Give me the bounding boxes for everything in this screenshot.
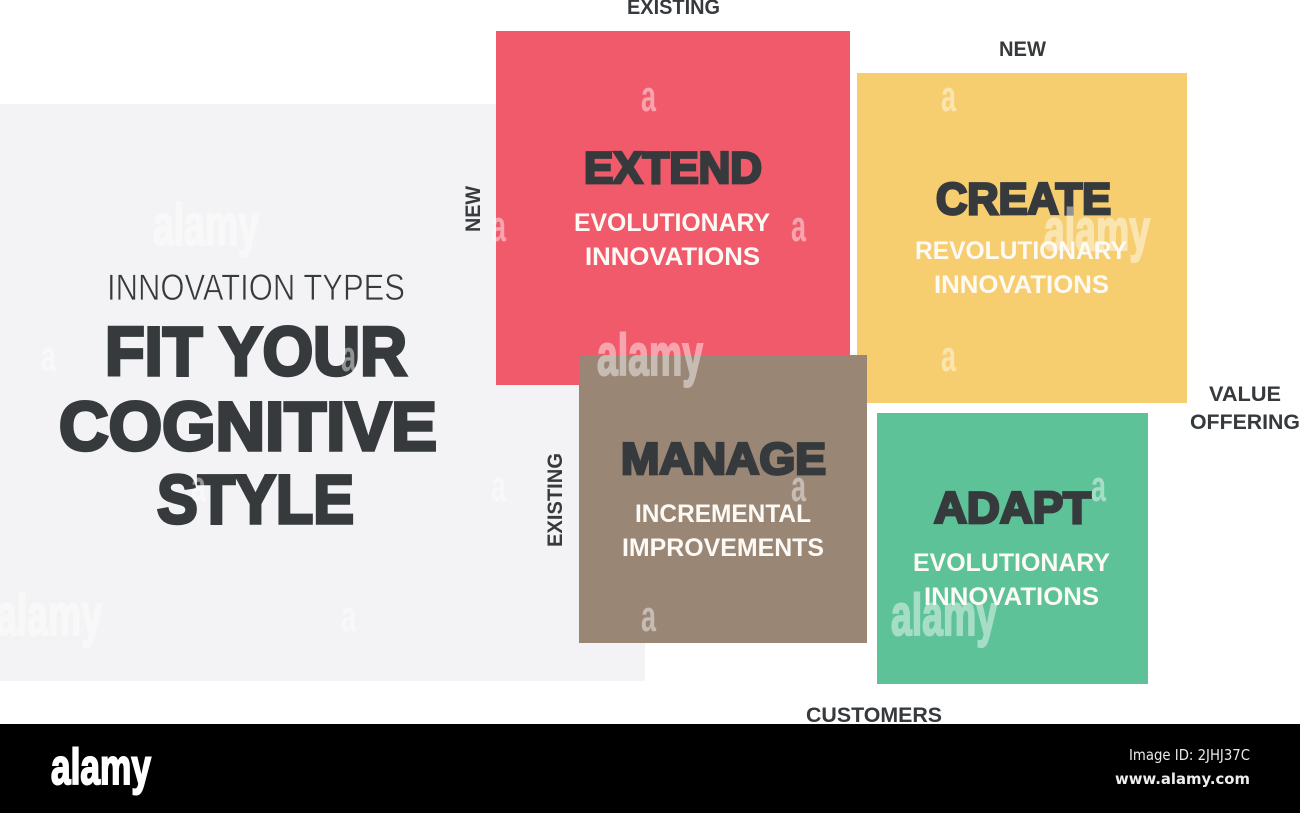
watermarks: a: [641, 592, 656, 641]
panel: manage: MANAGE: [621, 435, 826, 484]
watermarks: alamy: [597, 323, 703, 388]
axis label: existing vertical: EXISTING: [544, 453, 567, 547]
axis label: value offering: VALUE: [1209, 383, 1281, 406]
axis label: value offering: OFFERING: [1190, 411, 1300, 434]
panel: extend: EVOLUTIONARY: [574, 209, 770, 237]
panel: create: CREATE: [936, 175, 1111, 224]
footer image id: Image ID: 2JHJ37C: [1129, 746, 1250, 764]
title: fit your cognitive style: [59, 313, 437, 538]
watermarks: a: [941, 72, 956, 121]
watermarks: a: [791, 462, 806, 511]
watermarks: a: [791, 202, 806, 251]
panel: adapt: ADAPT: [934, 484, 1091, 533]
panel: create: REVOLUTIONARY: [915, 237, 1127, 265]
watermarks: a: [491, 462, 506, 511]
panel: extend: INNOVATIONS: [585, 243, 760, 271]
watermarks: a: [341, 332, 356, 381]
axis label: customers: CUSTOMERS: [806, 704, 942, 727]
panel: adapt: [877, 413, 1148, 684]
watermarks: a: [491, 202, 506, 251]
title: fit your cognitive style: FIT YOUR: [105, 313, 407, 390]
title: fit your cognitive style: COGNITIVE: [59, 388, 437, 465]
panel: manage: INCREMENTAL: [635, 500, 811, 528]
watermarks: a: [641, 72, 656, 121]
panel: extend: [496, 31, 850, 385]
axis label: new vertical: NEW: [462, 186, 485, 232]
panel: extend: EXTEND: [584, 144, 762, 193]
panel: create: INNOVATIONS: [934, 271, 1109, 299]
panel: adapt: INNOVATIONS: [924, 583, 1099, 611]
watermarks: a: [341, 592, 356, 641]
axis label: new top: NEW: [999, 38, 1046, 61]
footer bar: [0, 724, 1300, 813]
panel: manage: [579, 355, 867, 643]
watermarks: alamy: [0, 583, 102, 648]
title: fit your cognitive style: STYLE: [157, 461, 354, 538]
watermarks: a: [941, 332, 956, 381]
panel: grey background: [0, 104, 645, 681]
watermarks: alamy: [891, 583, 997, 648]
panel: adapt: EVOLUTIONARY: [913, 549, 1110, 577]
footer url: www.alamy.com: [1115, 770, 1250, 788]
panel: create: [857, 73, 1187, 403]
watermarks: alamy: [1044, 198, 1150, 263]
axis label: value offering: [1190, 383, 1300, 434]
watermarks: a: [41, 332, 56, 381]
watermarks: a: [191, 462, 206, 511]
watermarks: a: [1091, 462, 1106, 511]
panel: manage: IMPROVEMENTS: [622, 534, 824, 562]
watermarks: [0, 72, 1150, 648]
heading: innovation types: INNOVATION TYPES: [107, 267, 405, 308]
watermarks: alamy: [153, 193, 259, 258]
footer logo: alamy: [51, 739, 151, 795]
